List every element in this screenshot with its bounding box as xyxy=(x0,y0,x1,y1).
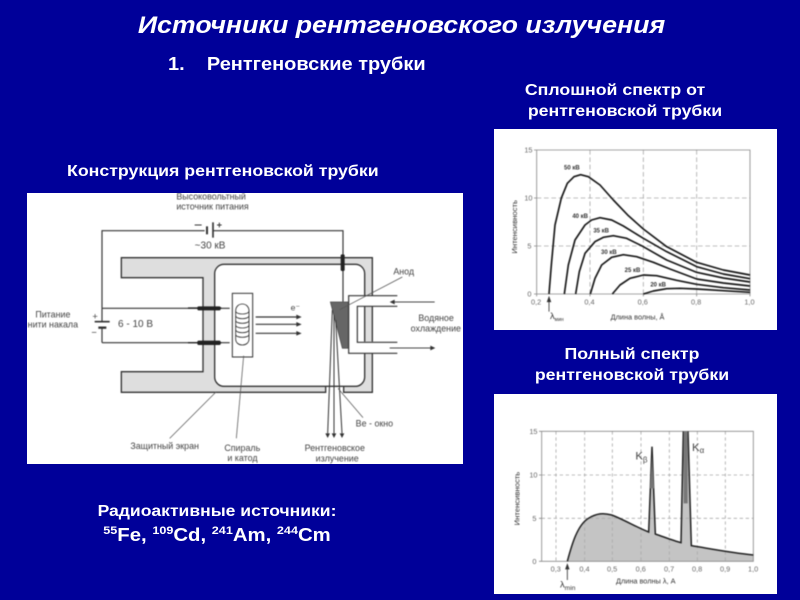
spectrum outline xyxy=(567,431,753,561)
chart labels: 20 кВ xyxy=(650,282,667,288)
chart labels: 0,5 xyxy=(607,565,617,574)
diagram labels: Питание xyxy=(35,310,70,320)
diagram labels: Защитный экран xyxy=(130,441,199,451)
chart labels: Интенсивность xyxy=(510,200,519,254)
axes xyxy=(539,431,753,561)
chart labels: 10 xyxy=(529,471,537,480)
chart labels: λ xyxy=(560,579,565,589)
panel: full spectrum chart xyxy=(494,394,777,594)
spectrum curves xyxy=(549,175,750,294)
diagram labels: излучение xyxy=(316,453,359,463)
chart labels: 0 xyxy=(527,290,531,299)
filament feedthroughs xyxy=(188,306,221,345)
diagram labels: Ве - окно xyxy=(356,419,393,429)
chart labels: 0,6 xyxy=(638,297,648,306)
heading: x-ray tubes: 1. Рентгеновские трубки xyxy=(168,54,426,74)
chart labels: Длина волны, Å xyxy=(611,313,665,322)
peak fill xyxy=(650,431,688,503)
leader lines xyxy=(170,277,402,438)
chart labels: α xyxy=(700,446,705,455)
chart labels: 10 xyxy=(524,194,532,203)
chart labels: K xyxy=(692,442,700,454)
chart labels: K xyxy=(635,450,643,462)
heading: full spectrum xyxy=(535,346,729,384)
chart labels: 0,9 xyxy=(720,565,730,574)
chart labels: 0,3 xyxy=(551,565,561,574)
diagram labels: Спираль xyxy=(224,443,261,453)
chart labels: 0 xyxy=(532,557,536,566)
diagram labels: 6 - 10 В xyxy=(118,319,153,330)
tube vessel xyxy=(215,264,365,386)
high-voltage battery xyxy=(195,222,222,238)
cathode and coil xyxy=(232,293,253,357)
chart labels: 0,7 xyxy=(664,565,674,574)
diagram labels: нити накала xyxy=(28,320,78,330)
chart labels: 35 кВ xyxy=(593,229,610,235)
heading: full spectrum: рентгеновской трубки xyxy=(535,367,729,384)
diagram labels: e⁻ xyxy=(291,302,300,312)
lambda-min arrow xyxy=(547,297,551,312)
isotope list: 55Fe, 109Cd, 241Am, 244Cm xyxy=(103,525,331,545)
diagram labels: охлаждение xyxy=(411,323,461,333)
electron beams xyxy=(256,315,302,336)
sources heading: Радиоактивные источники: xyxy=(98,503,336,520)
chart labels: 5 xyxy=(532,514,536,523)
diagram labels: Анод xyxy=(393,266,415,276)
chart labels: 15 xyxy=(524,145,532,154)
diagram labels: Водяное xyxy=(418,313,454,323)
axes xyxy=(534,150,750,296)
heading: tube construction: Конструкция рентгеновской трубки xyxy=(67,163,379,180)
chart labels: 0,8 xyxy=(692,565,702,574)
panel: continuous spectrum chart xyxy=(494,129,777,330)
chart labels: 1,0 xyxy=(748,565,758,574)
chart labels: min xyxy=(565,585,576,592)
chart labels: β xyxy=(643,456,648,465)
diagram labels: и катод xyxy=(227,453,258,463)
filament battery xyxy=(95,322,110,328)
x-ray beams xyxy=(325,310,344,438)
grid xyxy=(542,431,753,561)
chart labels: 15 xyxy=(529,427,537,436)
high-voltage wiring xyxy=(102,231,343,308)
anode xyxy=(330,302,348,348)
chart labels xyxy=(512,427,758,592)
heading: continuous spectrum: рентгеновской трубки xyxy=(528,103,722,120)
grid xyxy=(537,150,750,294)
heading: continuous spectrum xyxy=(525,82,722,120)
radioactive sources xyxy=(98,503,336,545)
heading: full spectrum: Полный спектр xyxy=(565,346,699,363)
chart labels: 5 xyxy=(527,242,531,251)
chart labels: 30 кВ xyxy=(601,250,617,256)
shield xyxy=(121,258,372,392)
chart labels: Длина волны λ, А xyxy=(616,576,676,585)
heading: continuous spectrum: Сплошной спектр от xyxy=(525,82,705,99)
cooling arrows xyxy=(390,300,435,350)
high-voltage feedthrough xyxy=(341,254,345,271)
chart labels: 25 кВ xyxy=(625,268,641,274)
diagram labels: + xyxy=(92,311,98,321)
chart labels: мин xyxy=(555,317,564,323)
diagram labels: Рентгеновское xyxy=(305,443,365,453)
diagram labels: источник питания xyxy=(176,202,249,212)
chart labels: 0,4 xyxy=(584,297,595,306)
chart labels: 40 кВ xyxy=(572,214,589,220)
filament wiring xyxy=(102,308,230,343)
filled spectrum xyxy=(567,431,753,561)
chart labels: Интенсивность xyxy=(512,472,521,525)
chart labels: 0,8 xyxy=(691,297,701,306)
lambda-min arrow xyxy=(566,564,569,580)
panel: x-ray tube diagram xyxy=(27,193,463,464)
chart labels: 0,6 xyxy=(636,565,646,574)
chart labels: 0,2 xyxy=(531,297,541,306)
title: Источники рентгеновского излучения xyxy=(138,12,665,39)
diagram labels xyxy=(28,192,461,463)
chart labels: 1,0 xyxy=(744,297,755,306)
chart labels: 0,4 xyxy=(579,565,590,574)
diagram labels: − xyxy=(91,328,97,338)
chart labels: λ xyxy=(550,311,555,321)
diagram labels: ~30 кВ xyxy=(195,241,226,252)
chart labels xyxy=(510,145,755,323)
cooling jacket xyxy=(349,296,397,353)
chart labels: 50 кВ xyxy=(564,166,580,172)
